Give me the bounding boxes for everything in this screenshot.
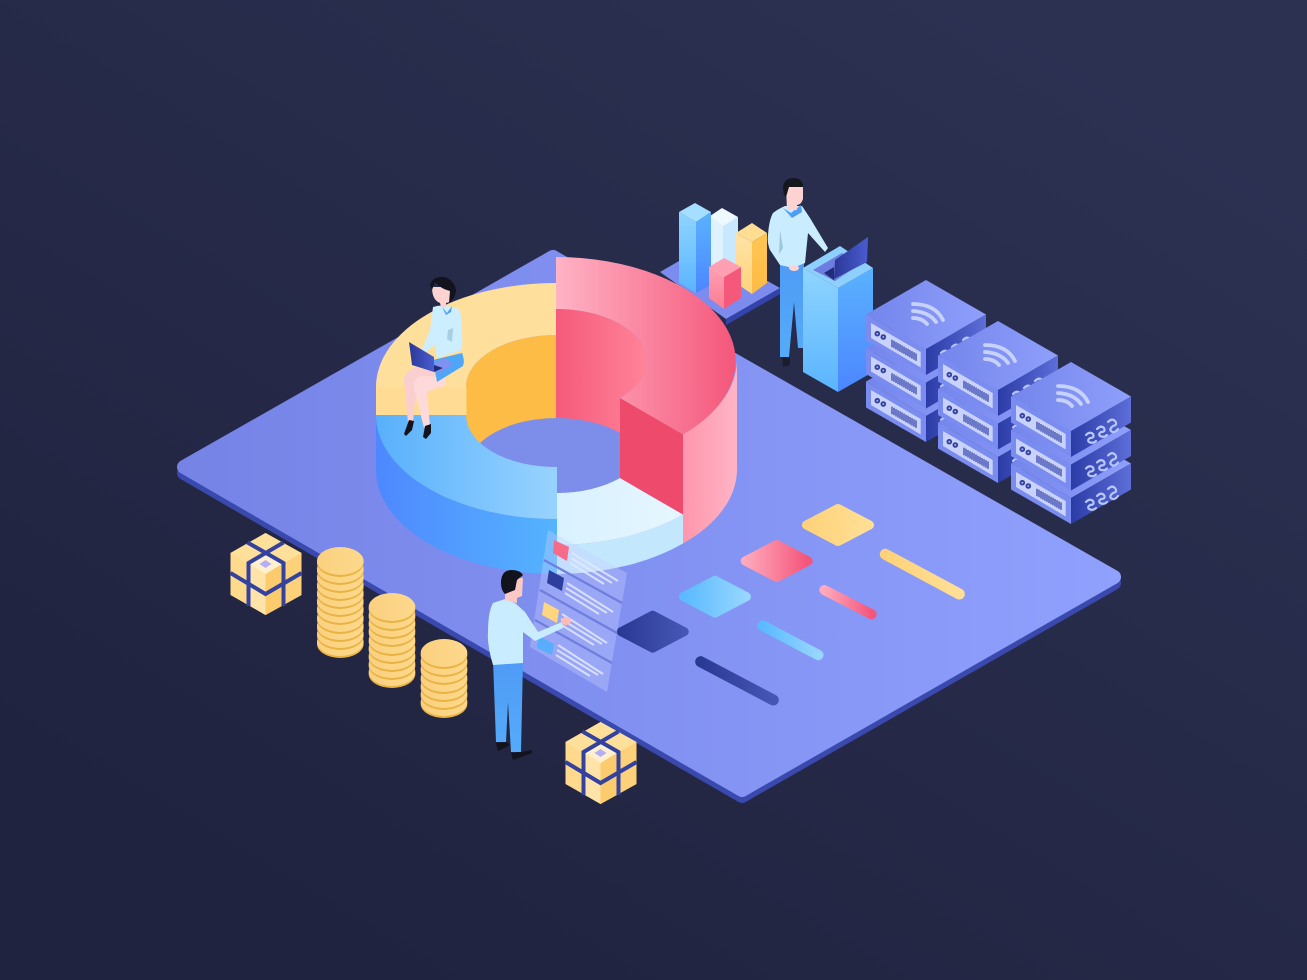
3D donut chart — [376, 257, 737, 574]
server racks — [866, 280, 1131, 524]
laptop screen — [834, 237, 868, 279]
key: navy — [621, 615, 773, 700]
face — [786, 187, 803, 210]
key: red — [745, 544, 872, 614]
hair — [430, 277, 456, 303]
red inner wall — [556, 309, 647, 433]
hole floor — [466, 418, 646, 522]
keyboard recess — [813, 253, 860, 281]
collar — [783, 205, 802, 218]
wifi icon — [913, 304, 943, 324]
row separators — [535, 560, 622, 663]
skirt — [433, 353, 464, 382]
bar: white — [710, 208, 738, 282]
blouse shadow — [447, 328, 453, 342]
wifi icon — [1058, 386, 1088, 406]
red outer side — [683, 361, 737, 544]
right shoe — [511, 750, 532, 760]
bar chart shelf — [660, 246, 780, 325]
shoe — [782, 357, 790, 367]
podium left face — [803, 268, 838, 392]
yellow segment cut face — [376, 387, 466, 415]
podium right face — [838, 268, 873, 392]
server stack 3 — [1011, 362, 1131, 524]
face — [432, 287, 450, 308]
left shoe — [496, 742, 510, 751]
hair — [783, 178, 803, 197]
key: yellow — [806, 508, 959, 594]
laptop — [409, 342, 453, 373]
wifi icon — [985, 345, 1015, 365]
person standing at podium — [768, 178, 828, 367]
shirt — [488, 599, 563, 665]
key: blue — [684, 580, 818, 655]
bar: yellow — [736, 223, 767, 294]
coin stack 3 — [421, 639, 467, 718]
far leg — [404, 367, 438, 423]
coin stack 1 — [317, 547, 364, 658]
row 3 — [542, 602, 607, 645]
neck and face — [505, 578, 523, 603]
blue segment top — [376, 415, 557, 519]
red segment top — [556, 257, 736, 434]
recess shadow — [824, 267, 835, 281]
server stack 1 — [866, 280, 986, 442]
server stack 2 — [938, 321, 1058, 483]
hand — [789, 265, 799, 271]
pale segment top — [557, 478, 683, 545]
coin stack 2 — [369, 593, 415, 688]
hand — [561, 617, 571, 625]
row 4 — [537, 636, 603, 676]
collar — [442, 306, 452, 315]
pale segment side — [557, 514, 683, 574]
legend keys on platform — [621, 508, 959, 700]
shirt — [768, 206, 828, 268]
bar chart — [679, 203, 767, 309]
near leg — [414, 376, 446, 428]
red cut face — [620, 398, 683, 514]
trousers — [493, 660, 523, 752]
transparent data panel — [530, 530, 627, 692]
bar: blue — [679, 203, 711, 293]
blouse — [422, 306, 462, 358]
panel background — [530, 530, 627, 692]
row 2 — [547, 570, 613, 614]
row 1 — [553, 540, 618, 584]
gift box bottom — [566, 722, 636, 804]
podium top — [803, 246, 873, 288]
yellow segment top — [376, 283, 556, 387]
man pointing at panel — [488, 570, 571, 760]
podium with laptop — [803, 237, 873, 392]
hair — [501, 570, 523, 594]
gift box left — [230, 533, 302, 615]
bar: red — [709, 258, 741, 309]
yellow inner wall — [466, 335, 556, 443]
main isometric platform — [184, 257, 1114, 796]
far shoe — [404, 420, 414, 436]
woman sitting on chart with laptop — [404, 277, 464, 439]
blue segment side — [376, 415, 557, 574]
sleeve shadow — [779, 230, 783, 254]
near shoe — [423, 424, 431, 439]
trousers — [780, 260, 804, 357]
